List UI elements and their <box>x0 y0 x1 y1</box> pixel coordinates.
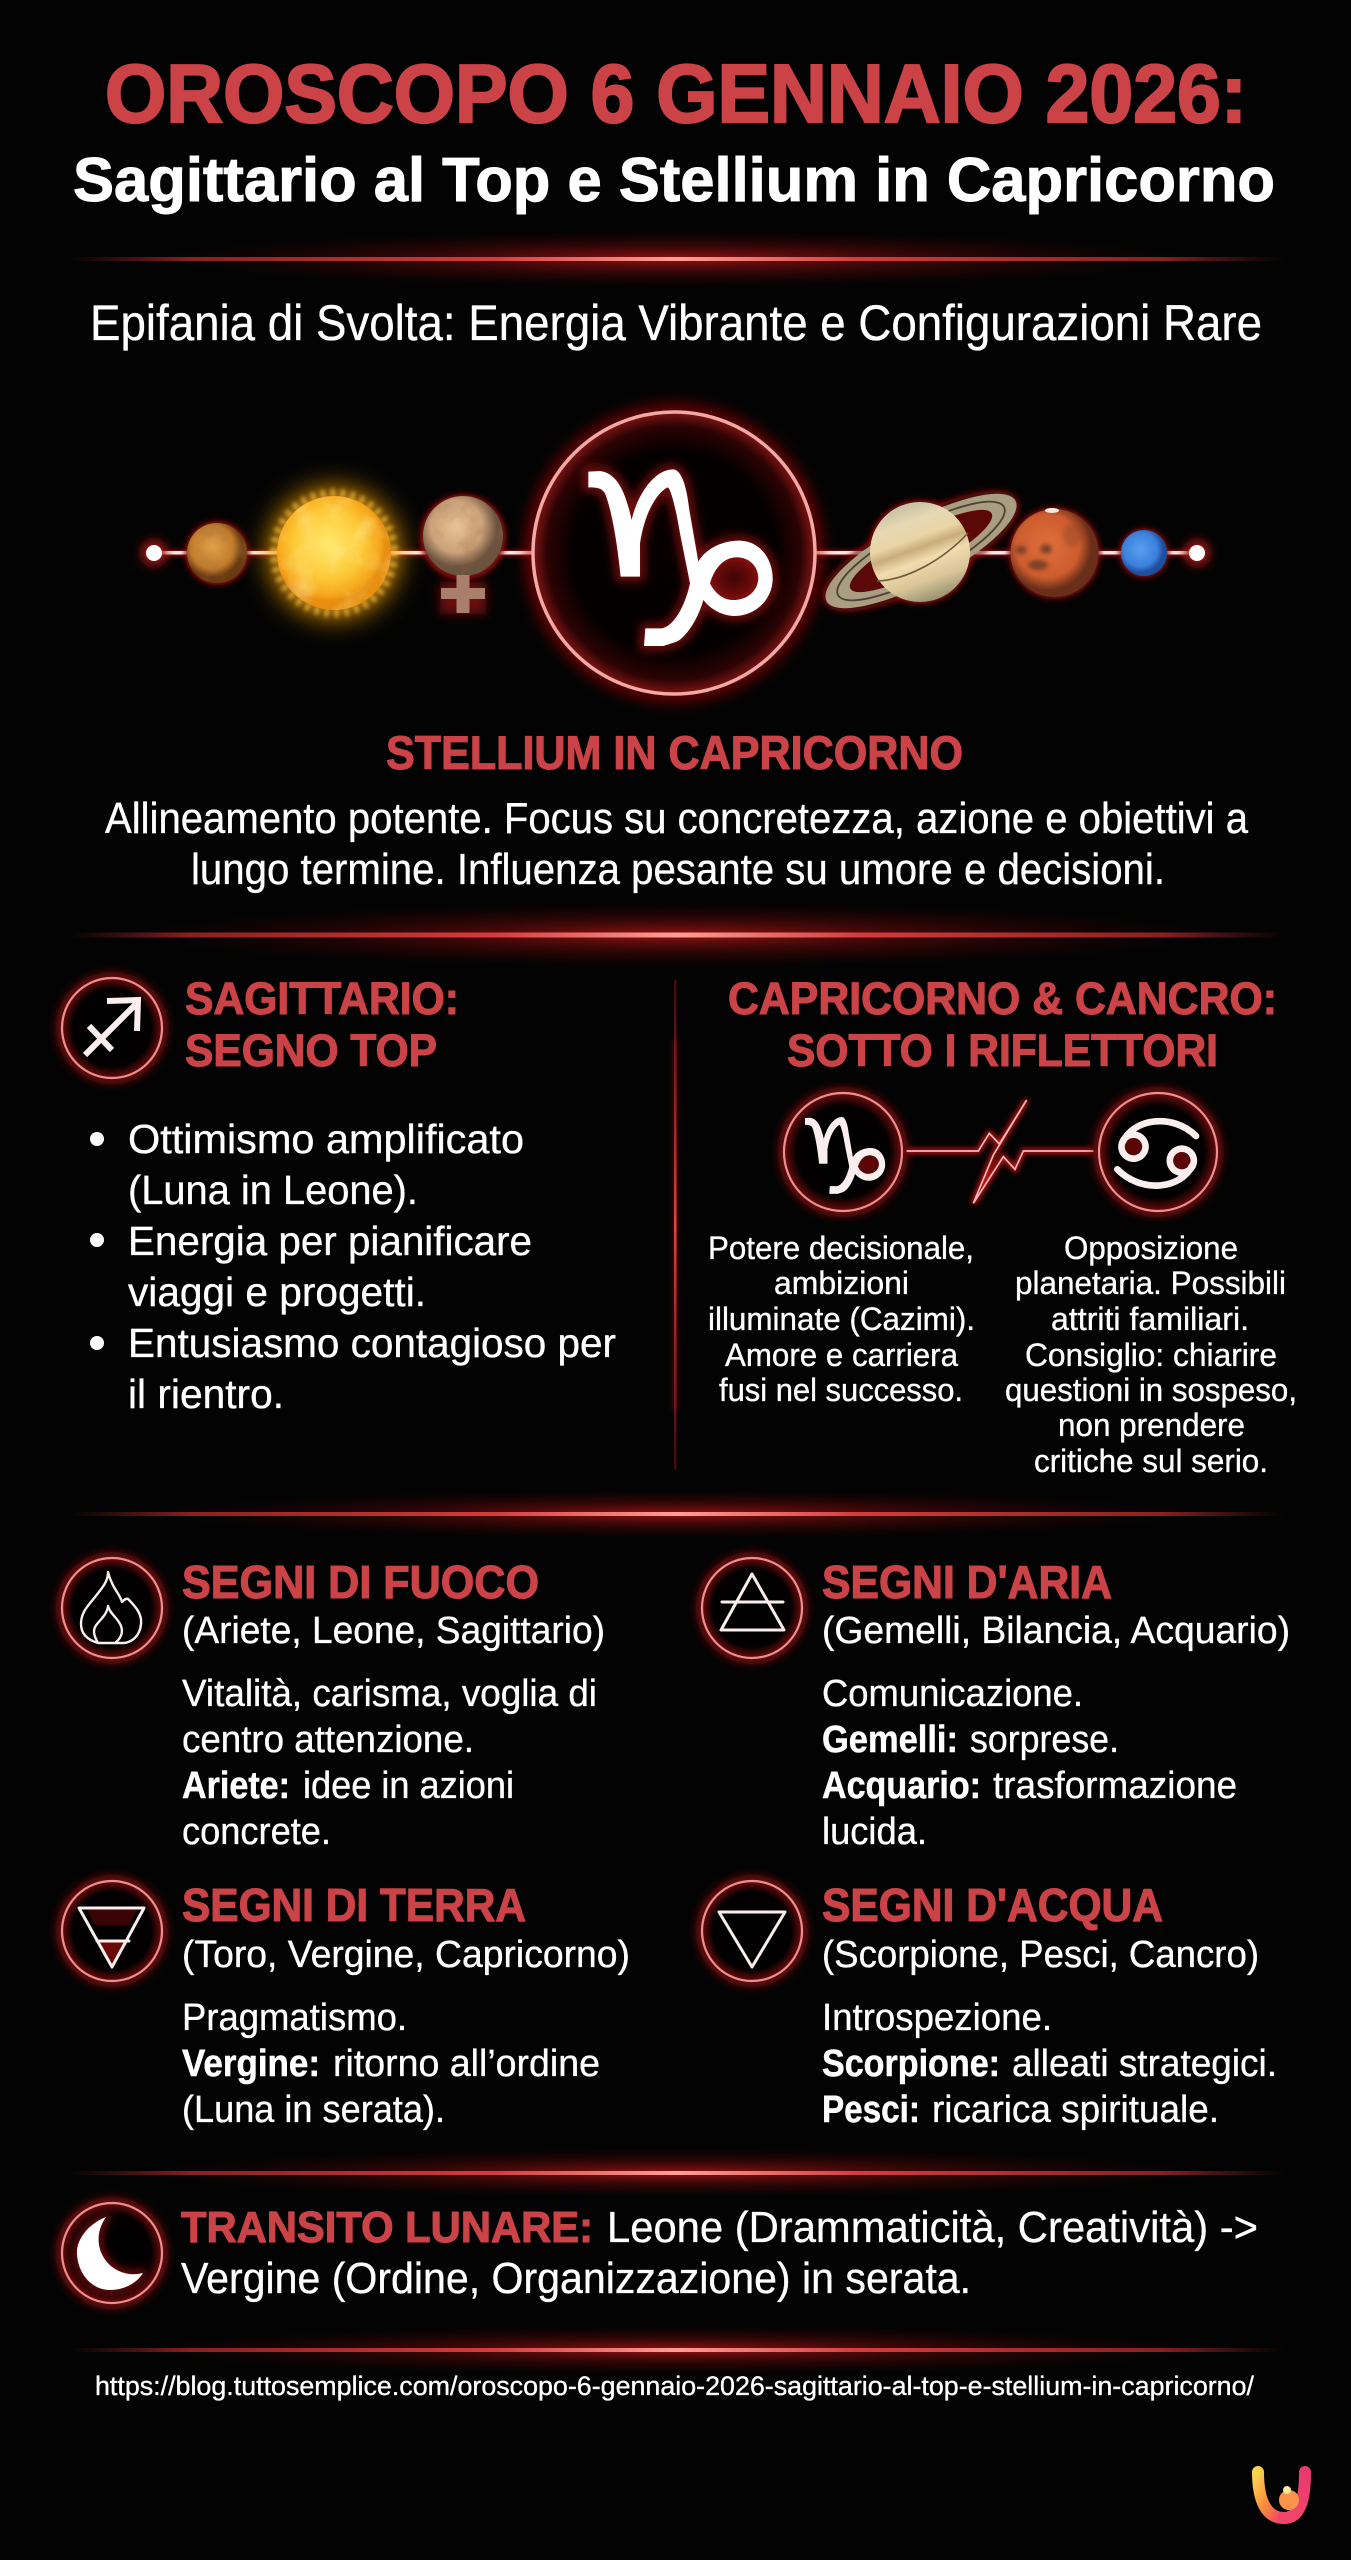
description: Pragmatismo. <box>182 1997 407 2039</box>
title: OROSCOPO 6 GENNAIO 2026: <box>105 47 1247 140</box>
description: idee in azioni <box>303 1765 514 1807</box>
text: Capricorno: illuminate (Cazimi). <box>708 1301 975 1337</box>
bullet list: il rientro. <box>128 1371 284 1417</box>
icon: fire <box>62 1558 162 1658</box>
heading <box>728 973 1277 1076</box>
planet: Mars <box>1008 507 1100 599</box>
text: Cancro: planetaria. Possibili <box>1015 1265 1286 1301</box>
icon: earth <box>62 1881 162 1981</box>
panel: Sagittario <box>62 973 616 1417</box>
planet: Venus <box>420 494 506 614</box>
signs list: (Scorpione, Pesci, Cancro) <box>822 1934 1259 1976</box>
stellium description: Allineamento potente. Focus su concretezza, azione e obiettivi a <box>105 794 1248 843</box>
description: Pesci: <box>822 2089 920 2131</box>
tagline: Epifania di Svolta: Energia Vibrante e Configurazioni Rare <box>90 295 1262 351</box>
description: Introspezione. <box>822 1997 1052 2039</box>
heading <box>185 973 459 1076</box>
description: lucida. <box>822 1811 927 1853</box>
description <box>182 1673 597 1853</box>
text: Capricorno: ambizioni <box>774 1265 909 1301</box>
description: Vergine: <box>182 2043 320 2085</box>
description: Gemelli: <box>822 1719 958 1761</box>
heading: SEGNI D'ACQUA <box>822 1879 1163 1931</box>
source URL: https://blog.tuttosemplice.com/oroscopo-6-gennaio-2026-sagittario-al-top-e-stellium-in-capricorno/ <box>95 2371 1254 2401</box>
text: Capricorno: Amore e carriera <box>725 1337 958 1373</box>
bullet list: (Luna in Leone). <box>128 1167 418 1213</box>
planet: Mercury <box>185 521 249 585</box>
heading: SEGNI D'ARIA <box>822 1556 1112 1608</box>
signs list: (Gemelli, Bilancia, Acquario) <box>822 1610 1290 1652</box>
subtitle headline: Sagittario al Top e Stellium in Capricorno <box>73 146 1275 215</box>
description: Comunicazione. <box>822 1673 1083 1715</box>
panel: transito lunare <box>62 2203 1258 2303</box>
text: Capricorno <box>708 1230 975 1408</box>
description: Scorpione: <box>822 2043 1000 2085</box>
description: Vitalità, carisma, voglia di <box>182 1673 597 1715</box>
transit text <box>181 2203 1258 2303</box>
transit text: Vergine (Ordine, Organizzazione) in serata. <box>181 2254 971 2303</box>
text: Cancro: questioni in sospeso, <box>1005 1372 1297 1408</box>
description: ricarica spirituale. <box>932 2089 1219 2131</box>
heading: SOTTO I RIFLETTORI <box>787 1025 1218 1076</box>
icon: lightning opposition line <box>907 1100 1093 1203</box>
description: alleati strategici. <box>1012 2043 1277 2085</box>
icon: air <box>702 1558 802 1658</box>
panel: segni di terra <box>62 1879 630 2131</box>
text: Cancro: Opposizione <box>1064 1230 1238 1266</box>
text: Capricorno: Potere decisionale, <box>708 1230 974 1266</box>
text: Cancro: attriti familiari. <box>1051 1301 1249 1337</box>
description: trasformazione <box>993 1765 1237 1807</box>
text: Cancro: critiche sul serio. <box>1034 1443 1268 1479</box>
stellium description <box>105 794 1248 894</box>
icon: Sagittarius <box>62 978 162 1078</box>
description: concrete. <box>182 1811 331 1853</box>
bullet list: viaggi e progetti. <box>128 1269 426 1315</box>
transit text: Leone (Drammaticità, Creatività) -> <box>607 2203 1258 2252</box>
panel: segni di fuoco <box>62 1556 605 1853</box>
description <box>822 1997 1277 2131</box>
bullet list: Entusiasmo contagioso per <box>128 1320 616 1366</box>
text: Capricorno: fusi nel successo. <box>719 1372 963 1408</box>
icon: Capricorn <box>784 1093 902 1211</box>
description: sorprese. <box>970 1719 1119 1761</box>
planet: Sun <box>270 489 398 617</box>
description: Ariete: <box>182 1765 290 1807</box>
orbit line <box>141 540 1210 566</box>
description: Acquario: <box>822 1765 981 1807</box>
title <box>73 47 1275 215</box>
icon: water <box>702 1881 802 1981</box>
panel: Capricorno e Cancro <box>708 973 1297 1479</box>
planet: Neptune <box>1119 528 1169 578</box>
description <box>182 1997 600 2131</box>
heading: CAPRICORNO & CANCRO: <box>728 973 1277 1024</box>
text: Cancro <box>1005 1230 1297 1479</box>
description: (Luna in serata). <box>182 2089 445 2131</box>
planetary alignment with Capricorn symbol <box>141 412 1210 694</box>
signs list: (Toro, Vergine, Capricorno) <box>182 1934 630 1976</box>
text: Cancro: Consiglio: chiarire <box>1025 1337 1277 1373</box>
bullet list <box>90 1116 616 1417</box>
description: ritorno all’ordine <box>333 2043 600 2085</box>
icon: Cancer <box>1099 1093 1217 1211</box>
icon: crescent moon <box>62 2203 162 2303</box>
planet: Saturn <box>811 472 1031 630</box>
stellium description: lungo termine. Influenza pesante su umore e decisioni. <box>191 845 1165 894</box>
heading: SAGITTARIO: <box>185 973 459 1024</box>
panel: segni d'acqua <box>702 1879 1277 2131</box>
description <box>822 1673 1237 1853</box>
stellium heading: STELLIUM IN CAPRICORNO <box>386 726 963 779</box>
heading: SEGNO TOP <box>185 1025 437 1076</box>
heading: SEGNI DI FUOCO <box>182 1556 539 1608</box>
description: centro attenzione. <box>182 1719 474 1761</box>
bullet list: Energia per pianificare <box>128 1218 532 1264</box>
heading: SEGNI DI TERRA <box>182 1879 526 1931</box>
big Capricorn medallion <box>533 412 815 694</box>
signs list: (Ariete, Leone, Sagittario) <box>182 1610 605 1652</box>
transit text: TRANSITO LUNARE: <box>181 2203 593 2252</box>
text: Cancro: non prendere <box>1058 1407 1245 1443</box>
bullet list: Ottimismo amplificato <box>128 1116 524 1162</box>
panel: segni d'aria <box>702 1556 1290 1853</box>
logo <box>1258 2472 1305 2518</box>
